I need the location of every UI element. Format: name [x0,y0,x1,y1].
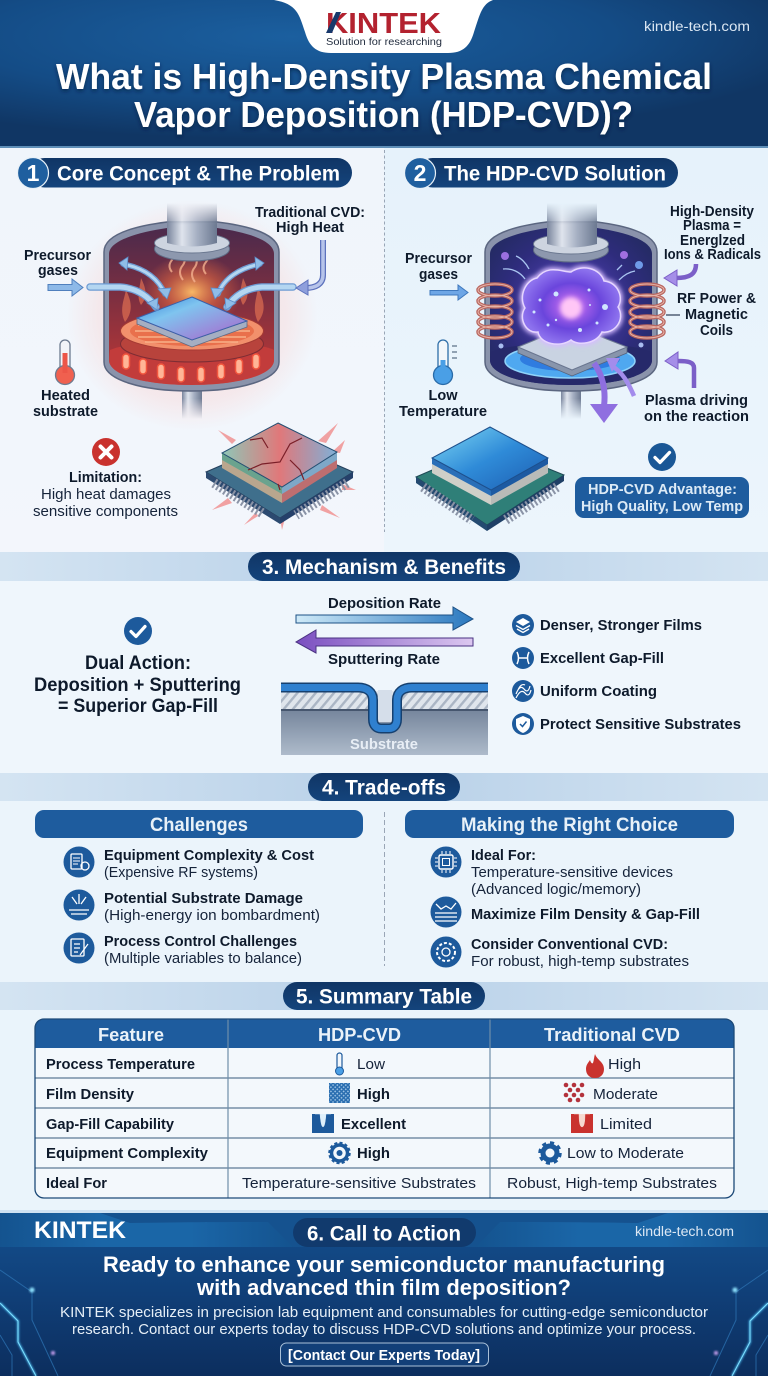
challenge: equipment [64,846,314,881]
limitation text: Limitation: [69,470,142,486]
section band 4 [0,773,768,801]
label: heated substrate: substrate [33,404,98,420]
advantage callout [575,477,749,518]
label: precursor gases: Precursor [405,251,472,267]
right choice heading [405,810,734,838]
call to action footer [0,1210,768,1376]
section band 4: 4. Trade-offs [322,776,446,800]
label: RF power and magnetic coils [666,291,757,339]
row: process temperature [46,1053,641,1078]
call to action paragraph: research. Contact our experts today to discuss HDP-CVD solutions and optimize your process. [72,1322,696,1338]
gap-fill diagram: Substrate [350,737,418,753]
wafer [137,318,247,347]
contact button: [Contact Our Experts Today] [288,1347,480,1364]
section heading 2 [404,158,678,188]
challenge: process control: (Multiple variables to balance) [104,951,302,967]
call to action heading: with advanced thin film deposition? [196,1275,571,1300]
glowing platform [505,344,635,378]
gas flow arrows [90,264,293,307]
challenge: substrate damage: Potential Substrate Damage [104,891,303,907]
advantage callout: HDP-CVD Advantage: [588,482,737,498]
benefit: denser films [512,614,702,636]
table header: Traditional CVD [544,1025,680,1045]
row: process temperature: High [608,1057,641,1073]
label: precursor gases: gases [38,263,78,279]
label: high-density plasma [664,204,761,286]
panel: mechanism and benefits [0,552,768,773]
wafer [518,347,627,376]
benefit: gap-fill: Excellent Gap-Fill [540,651,664,667]
hot CVD chamber [90,203,293,419]
plasma flow arrows [594,363,605,406]
top gas tube and flange [547,204,597,226]
deposition rate arrow [296,596,473,630]
call to action heading [103,1252,665,1300]
label: heated substrate: Heated [41,388,90,404]
icon: limitation cross [92,438,120,466]
gap-fill diagram [281,688,488,755]
hot platform [120,326,264,362]
top gas tube and flange [167,204,217,226]
row: ideal for: Temperature-sensitive Substrates [242,1176,476,1192]
section 6 pill: 6. Call to Action [307,1222,461,1246]
RF coils [478,284,664,338]
choice: ideal for: Temperature-sensitive devices [471,865,673,881]
advantage callout: High Quality, Low Temp [581,499,743,515]
limitation text: High heat damages [41,487,171,503]
row: gap-fill capability: Excellent [341,1117,406,1133]
label: RF power and magnetic coils: Magnetic [685,307,748,323]
section heading 1: 1 [27,160,40,186]
choice: ideal for: Ideal For: [471,848,536,864]
benefits list [512,614,741,735]
title: What is High-Density Plasma Chemical [56,56,712,97]
circuit decoration [0,1270,768,1376]
heater flames [122,278,264,322]
table header [98,1025,680,1045]
row: ideal for: Ideal For [46,1176,107,1192]
row: process temperature: Low [357,1057,386,1073]
challenge: substrate damage [64,890,320,924]
footer logo: KINTEK [34,1217,127,1244]
challenges column [35,810,363,967]
challenges heading: Challenges [150,815,248,836]
choice: maximize density: Maximize Film Density & Gap-Fill [471,907,700,923]
dual action text: Dual Action: [85,653,191,674]
call to action paragraph [60,1305,708,1338]
icon: cold thermometer [434,340,457,384]
choice: ideal for [430,846,673,898]
benefit: protect substrates [512,713,741,735]
label: plasma driving the reaction [644,352,749,425]
website label: kindle-tech.com [644,19,750,34]
reactor floor and heaters [109,341,274,385]
label: traditional CVD high heat: High Heat [276,220,344,236]
healthy chip [416,427,564,531]
benefit: uniform coating: Uniform Coating [540,684,657,700]
header banner [0,0,768,148]
benefit: protect substrates: Protect Sensitive Substrates [540,717,741,733]
plasma cloud [522,268,621,344]
section band 5 [0,982,768,1010]
row: ideal for [46,1176,717,1192]
row: gap-fill capability: Limited [600,1117,652,1133]
call to action heading: Ready to enhance your semiconductor manufacturing [103,1252,665,1277]
label: high-density plasma: High-Density [670,204,754,220]
label: low temperature [399,388,487,420]
label: high-density plasma: Energlzed [680,233,745,249]
section band 3 [0,552,768,581]
row: equipment complexity: Equipment Complexity [46,1146,208,1162]
challenge: substrate damage: (High-energy ion bombardment) [104,908,320,924]
section band 5: 5. Summary Table [296,986,472,1008]
label: RF power and magnetic coils: Coils [700,323,733,339]
challenge: equipment: Equipment Complexity & Cost [104,848,314,864]
choice: conventional CVD: For robust, high-temp substrates [471,954,689,970]
panel: the HDP-CVD solution [399,158,760,531]
dual action text: = Superior Gap-Fill [58,696,218,717]
choice: maximize density [430,896,700,928]
benefit: gap-fill [512,647,664,669]
sputtering rate arrow: Sputtering Rate [328,652,440,668]
title [56,56,712,135]
label: traditional CVD high heat [255,205,365,295]
choice: conventional CVD: Consider Conventional CVD: [471,937,668,953]
sputtering rate arrow [296,630,473,668]
dual action text [34,653,241,717]
label: heated substrate [33,388,98,420]
right choice heading: Making the Right Choice [461,815,678,836]
label: plasma driving the reaction: on the reaction [644,409,749,425]
benefit: uniform coating [512,680,657,702]
section heading 1: Core Concept & The Problem [57,162,340,186]
row: film density: Film Density [46,1087,134,1103]
choice: conventional CVD [430,936,689,970]
challenge: equipment: (Expensive RF systems) [104,865,258,881]
label: high-density plasma: Plasma = [683,218,741,234]
section 6 pill [293,1218,476,1247]
ions and radicals [498,251,644,348]
icon: hot thermometer [56,340,74,384]
section heading 2: 2 [414,160,426,186]
label: precursor gases [405,251,472,300]
logo tab [274,0,493,53]
logo tab: Solution for researching [326,36,442,48]
limitation text: sensitive components [33,504,178,520]
deposition rate arrow: Deposition Rate [328,596,441,612]
row: film density: High [357,1087,390,1103]
right choice column [405,810,734,970]
call to action paragraph: KINTEK specializes in precision lab equipment and consumables for cutting-edge semiconductor [60,1305,708,1321]
label: traditional CVD high heat: Traditional CVD: [255,205,365,221]
table header: HDP-CVD [318,1025,401,1045]
section heading 1 [18,158,352,188]
label: plasma driving the reaction: Plasma driving [645,393,748,409]
row: equipment complexity [46,1143,684,1163]
row: equipment complexity: High [357,1146,390,1162]
benefit: denser films: Denser, Stronger Films [540,618,702,634]
logo tab: KINTEK [326,8,441,40]
row: film density [46,1083,658,1103]
plasma chamber [478,203,664,423]
footer website: kindle-tech.com [635,1224,734,1239]
label: low temperature: Low [428,388,458,404]
limitation text [33,470,178,520]
choice: ideal for: (Advanced logic/memory) [471,882,641,898]
comparison table [35,1019,734,1198]
challenge: process control: Process Control Challenges [104,934,297,950]
section heading 2: The HDP-CVD Solution [444,162,666,186]
row: equipment complexity: Low to Moderate [567,1146,684,1162]
row: gap-fill capability [46,1114,652,1133]
icon: advantage check [648,443,676,471]
panel: core concept and the problem [18,158,364,530]
title: Vapor Deposition (HDP-CVD)? [134,94,633,135]
row: film density: Moderate [593,1087,658,1103]
icon: dual action check [124,617,152,645]
challenges heading [35,810,363,838]
panel: trade-offs [0,773,768,982]
table header: Feature [98,1025,164,1045]
label: low temperature: Temperature [399,404,487,420]
section band 3: 3. Mechanism & Benefits [262,556,506,579]
row: ideal for: Robust, High-temp Substrates [507,1176,717,1192]
label: precursor gases: gases [419,267,458,283]
row: process temperature: Process Temperature [46,1057,195,1073]
label: precursor gases: Precursor [24,248,91,264]
challenge: process control [64,932,302,967]
row: gap-fill capability: Gap-Fill Capability [46,1117,174,1133]
panel: summary table [0,982,768,1212]
label: precursor gases [24,248,91,296]
damaged chip [206,423,356,530]
dual action text: Deposition + Sputtering [34,675,241,696]
label: RF power and magnetic coils: RF Power & [677,291,757,307]
